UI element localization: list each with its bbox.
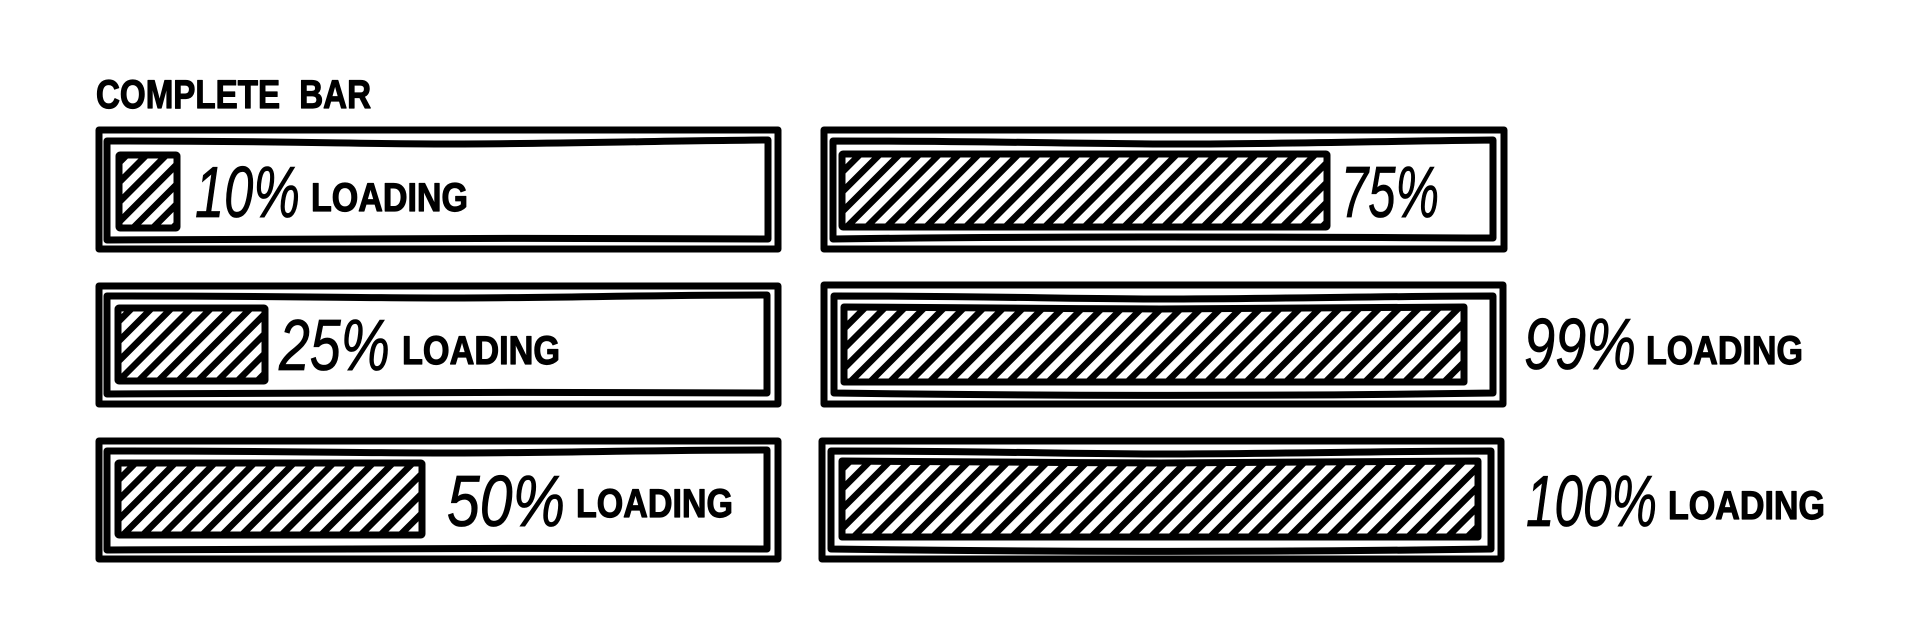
- panel: 50% loading bar: [99, 441, 778, 559]
- bar outer frame: [99, 441, 778, 559]
- percent label: 50%: [447, 462, 565, 542]
- loading label: LOADING: [1668, 484, 1825, 528]
- percent label: 75%: [1341, 153, 1439, 233]
- loading label: LOADING: [402, 329, 560, 373]
- loading label: LOADING: [311, 176, 468, 220]
- bar inner frame: [107, 295, 767, 394]
- bar outer frame: [824, 130, 1504, 249]
- percent label: 99%: [1524, 305, 1636, 385]
- bar inner frame: [831, 451, 1491, 551]
- progress fill 100%: [842, 461, 1478, 537]
- loading label: LOADING: [1646, 329, 1803, 373]
- bar inner frame: [834, 296, 1493, 395]
- panel: 10% loading bar: [99, 130, 778, 249]
- loading label: LOADING: [576, 482, 733, 526]
- bar outer frame: [99, 286, 778, 404]
- percent label: 10%: [195, 153, 300, 233]
- panel: 99% bar: [824, 285, 1803, 404]
- bar outer frame: [99, 130, 778, 249]
- panel: 100% bar: [822, 441, 1825, 559]
- bar outer frame: [822, 441, 1501, 559]
- progress fill 25%: [118, 308, 265, 381]
- progress fill 99%: [844, 307, 1464, 382]
- bar inner frame: [107, 450, 767, 550]
- bar outer frame: [824, 285, 1503, 404]
- percent label: 25%: [278, 306, 390, 386]
- panel: 75% bar: [824, 130, 1504, 249]
- title: COMPLETE BAR: [96, 73, 371, 117]
- percent label: 100%: [1526, 462, 1657, 542]
- bar inner frame: [107, 140, 768, 240]
- progress fill 75%: [842, 154, 1327, 227]
- bar inner frame: [833, 140, 1493, 239]
- progress fill 10%: [119, 155, 177, 228]
- panel: 25% loading bar: [99, 286, 778, 404]
- progress fill 50%: [118, 463, 422, 535]
